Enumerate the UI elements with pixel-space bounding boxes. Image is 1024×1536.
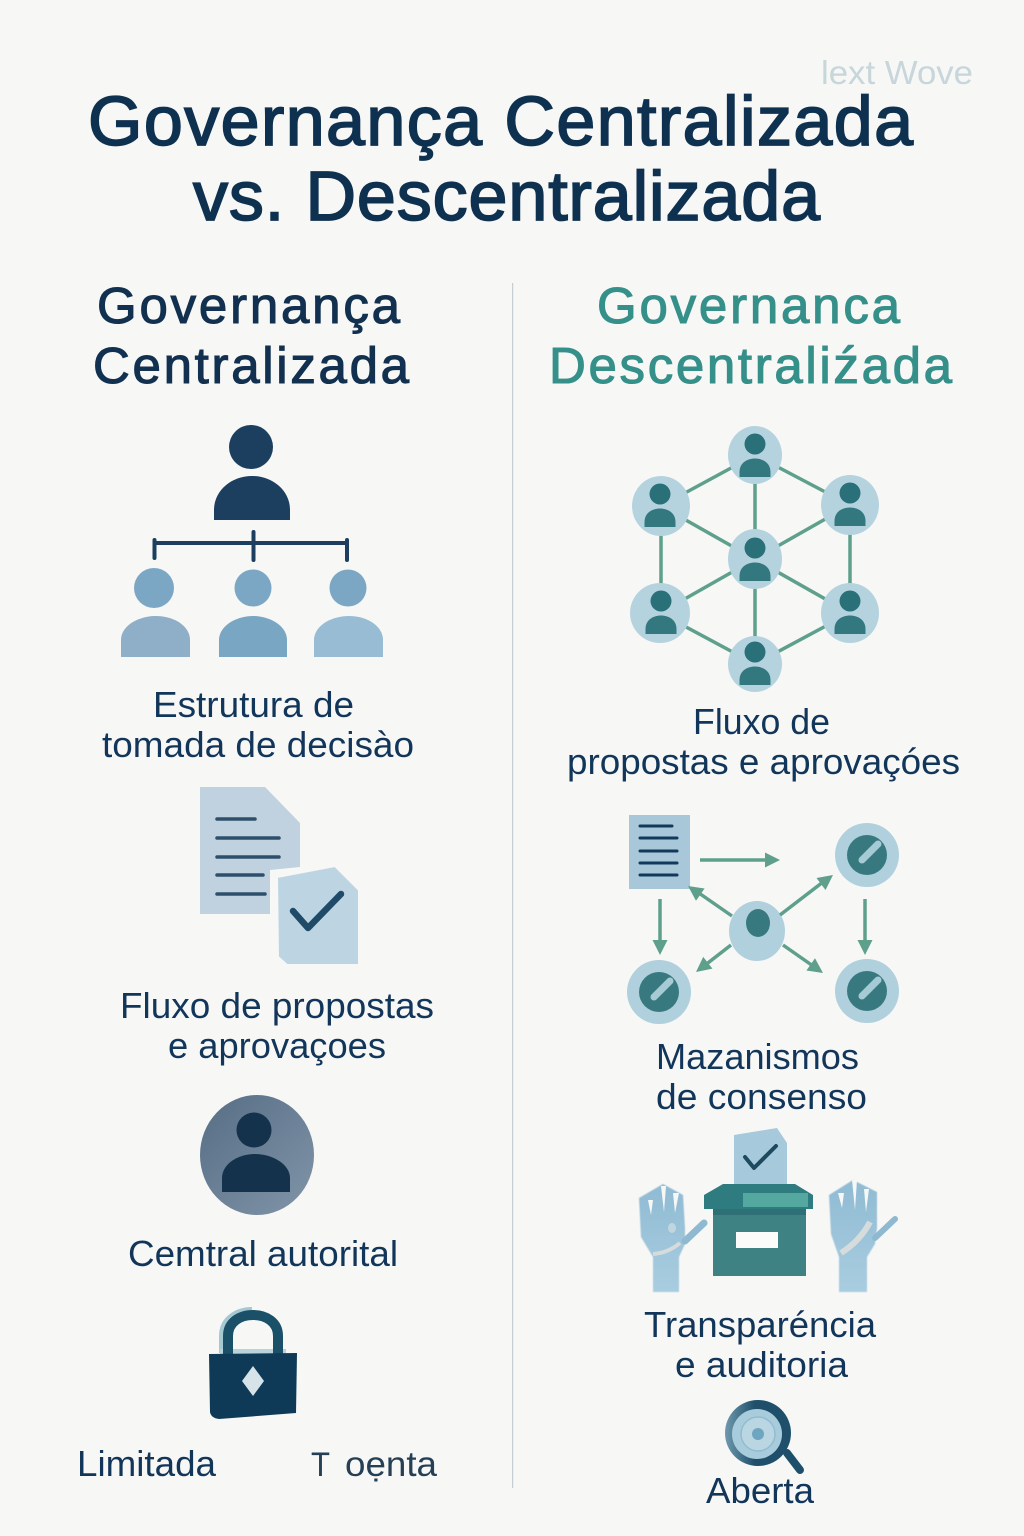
label: proposal flow bbox=[120, 985, 434, 1066]
label: garbled word bbox=[311, 1445, 438, 1484]
watermark: lext Wove bbox=[821, 54, 973, 91]
label: central authority: Cemtral autorital bbox=[128, 1233, 398, 1274]
label: proposal flow: e aprovaçoes bbox=[168, 1025, 386, 1066]
heading: decentralized: Descentraliźada bbox=[549, 337, 953, 394]
heading: decentralized: Governanca bbox=[597, 277, 901, 334]
label: garbled word: oẹnta bbox=[345, 1445, 438, 1484]
icon: hierarchy bbox=[121, 425, 383, 657]
label: transparency and audit bbox=[644, 1304, 877, 1385]
icon: voting box with hands bbox=[639, 1128, 895, 1292]
label: decision structure: tomada de decisào bbox=[102, 724, 414, 765]
icon: consensus flow bbox=[627, 815, 899, 1024]
label: decision structure bbox=[102, 684, 414, 765]
title bbox=[88, 82, 913, 235]
label: proposal flow bbox=[567, 701, 960, 782]
title: vs. Descentralizada bbox=[193, 157, 820, 235]
heading: decentralized bbox=[549, 277, 953, 394]
label: garbled word: T bbox=[311, 1446, 330, 1484]
icon: magnifying glass bbox=[725, 1400, 800, 1470]
label: consensus mechanisms: Mazanismos bbox=[656, 1036, 859, 1077]
heading: centralized: Governança bbox=[97, 277, 401, 334]
heading: centralized bbox=[93, 277, 410, 394]
panel: decentralized governance bbox=[549, 277, 960, 1511]
label: transparency and audit: e auditoria bbox=[675, 1344, 849, 1385]
icon: padlock bbox=[209, 1310, 297, 1419]
label: limited: Limitada bbox=[77, 1443, 217, 1484]
label: consensus mechanisms bbox=[656, 1036, 867, 1117]
title: Governança Centralizada bbox=[88, 82, 913, 160]
label: proposal flow: propostas e aprovaçóes bbox=[567, 741, 960, 782]
label: proposal flow: Fluxo de propostas bbox=[120, 985, 434, 1026]
panel: centralized governance bbox=[77, 277, 438, 1484]
icon: central authority avatar bbox=[200, 1095, 314, 1215]
icon: documents with check bbox=[200, 787, 359, 965]
label: consensus mechanisms: de consenso bbox=[656, 1076, 867, 1117]
label: open: Aberta bbox=[706, 1470, 815, 1511]
heading: centralized: Centralizada bbox=[93, 337, 410, 394]
icon: peer network bbox=[630, 426, 879, 692]
label: transparency and audit: Transparéncia bbox=[644, 1304, 877, 1345]
label: decision structure: Estrutura de bbox=[153, 684, 354, 725]
label: proposal flow: Fluxo de bbox=[693, 701, 830, 742]
